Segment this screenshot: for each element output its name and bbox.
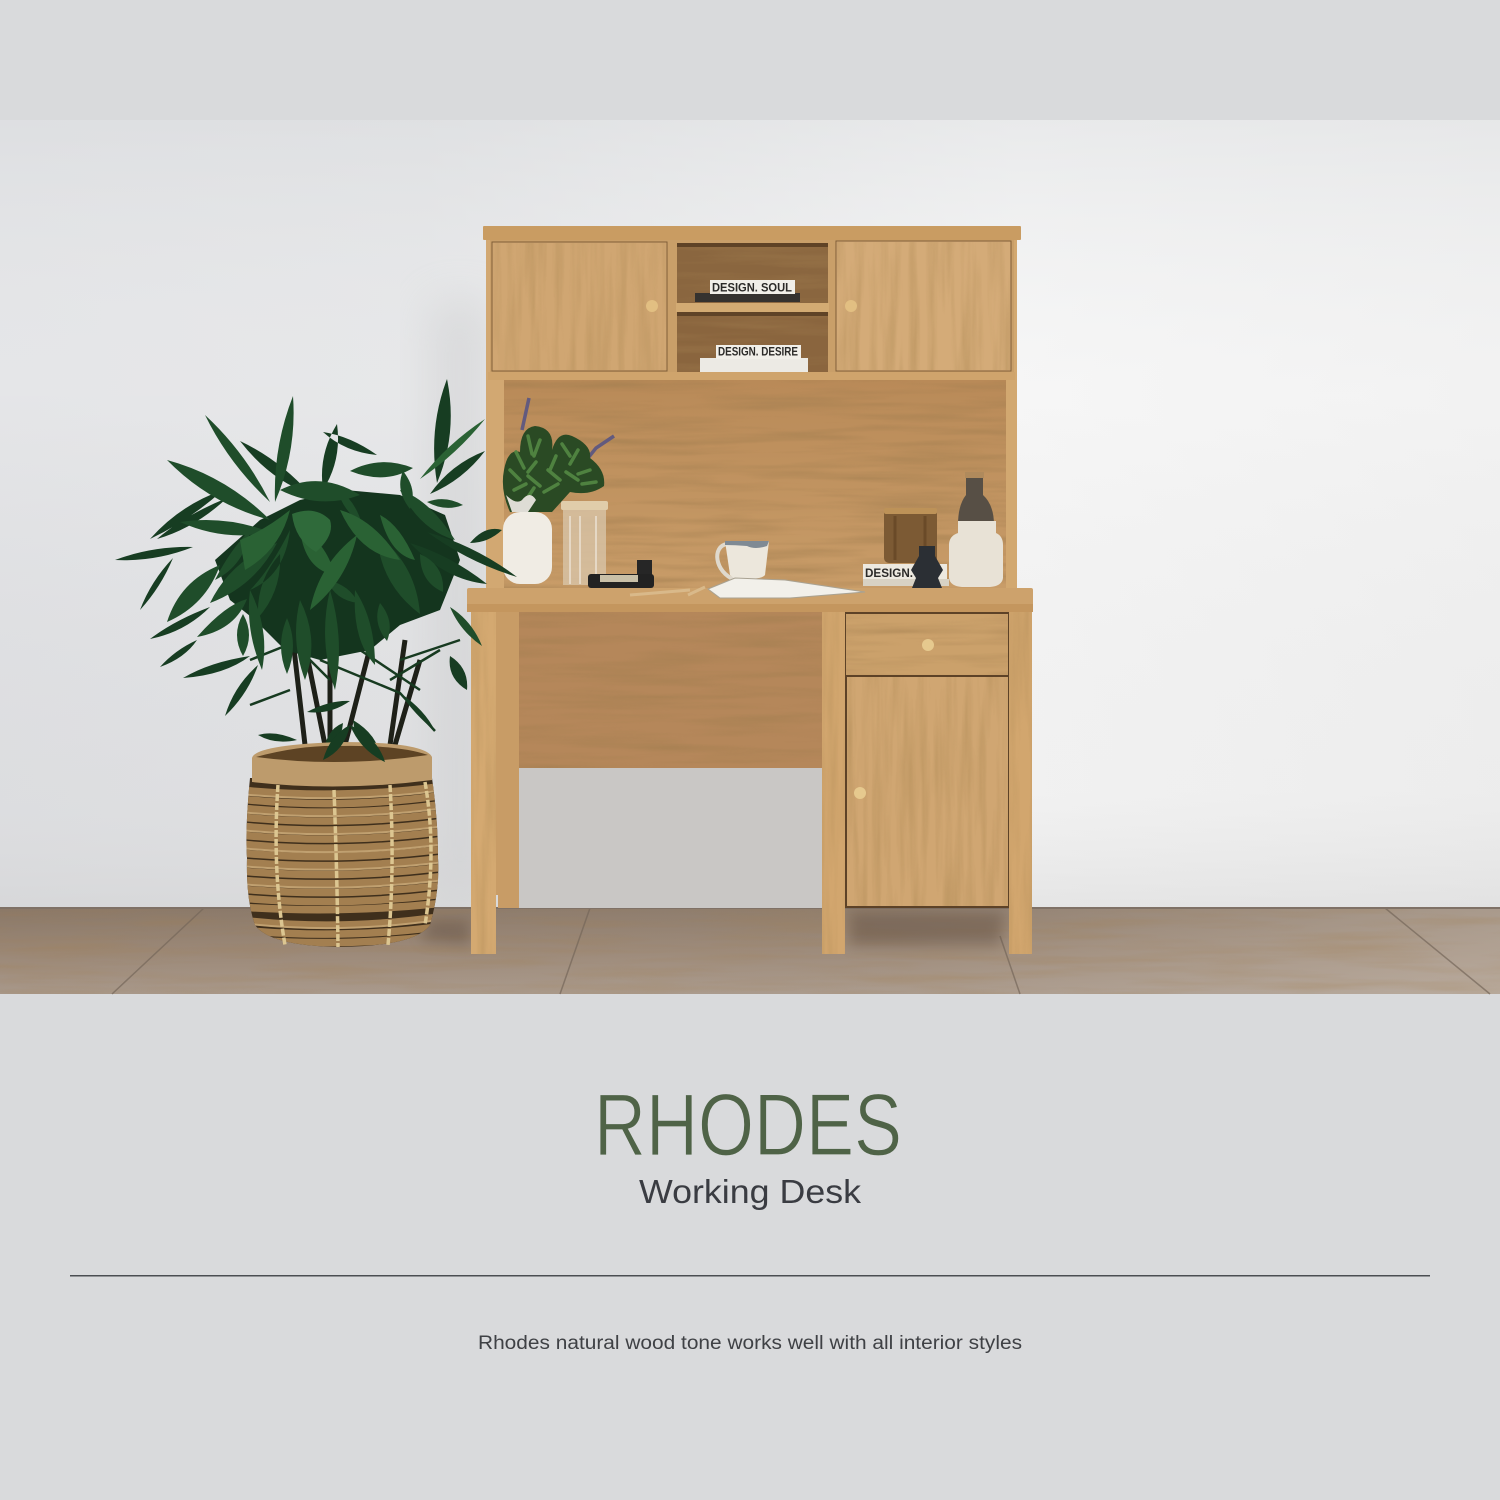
white vase — [503, 512, 552, 584]
top grey band — [0, 0, 1500, 120]
left leg — [471, 612, 519, 954]
drawer knob — [922, 639, 934, 651]
book: Design — [863, 564, 949, 586]
notebook and pencils on desktop — [630, 578, 865, 598]
pencils — [630, 587, 705, 595]
wooden floor — [0, 907, 1500, 994]
right cabinet door — [836, 241, 1011, 371]
desk — [467, 226, 1033, 954]
book: Design: DESIGN. — [865, 566, 913, 580]
lower cabinet door — [847, 677, 1008, 906]
plant in basket — [115, 379, 517, 950]
hutch top board — [483, 226, 1021, 240]
product photo: room scene — [0, 120, 1500, 994]
desktop items standing on the board — [503, 398, 1003, 588]
hutch lower shelf — [488, 372, 1015, 380]
dark foliage — [115, 379, 517, 757]
drawer — [846, 614, 1008, 675]
plant stems — [293, 620, 420, 745]
basket rim — [252, 742, 432, 787]
pale broad leaf — [292, 511, 331, 552]
bright leaves — [240, 419, 485, 610]
desktop board — [467, 588, 1033, 612]
floor shadow under desk — [420, 912, 1005, 945]
black ribbed vase — [911, 546, 943, 588]
glass jar — [561, 501, 608, 585]
divider line — [70, 1275, 1430, 1276]
door knob — [854, 787, 866, 799]
bottle — [958, 472, 994, 525]
hutch right side — [1006, 238, 1017, 590]
dark foliage mass — [215, 490, 460, 660]
potted herb plant — [503, 398, 614, 584]
subtitle: Working Desk — [639, 1173, 862, 1210]
shadow beneath desk — [518, 768, 822, 908]
cabinet recess — [845, 612, 1009, 908]
hutch left side — [486, 238, 504, 590]
modesty back panel — [517, 612, 822, 768]
upper cubby — [677, 243, 828, 303]
door knob — [646, 300, 658, 312]
right leg — [1009, 612, 1032, 954]
amber candle — [884, 508, 937, 563]
hutch back panel — [503, 380, 1007, 590]
books: Design, Desire — [700, 345, 808, 372]
middle shelf — [676, 303, 829, 312]
thin lower leaves — [250, 640, 460, 731]
bottom grey panel — [0, 994, 1500, 1500]
left cabinet door — [492, 242, 667, 371]
centre leg — [822, 612, 845, 954]
hutch cabinet back — [490, 240, 1014, 375]
books: Design, Soul: DESIGN. SOUL — [712, 282, 792, 294]
mid-green leaves — [167, 396, 482, 690]
wicker basket — [240, 742, 445, 950]
description text: Rhodes natural wood tone works well with all interior styles — [478, 1333, 1022, 1354]
lower cubby — [677, 312, 828, 372]
product title: RHODES — [594, 1075, 902, 1174]
books: Design, Desire: DESIGN. DESIRE — [718, 346, 798, 358]
white ceramic jar — [949, 521, 1003, 587]
books: Design, Soul — [695, 280, 800, 302]
leaves overlapping the rim — [323, 725, 385, 762]
ceramic cup — [717, 541, 769, 580]
black tube — [588, 560, 654, 588]
open notebook — [708, 578, 865, 598]
wall — [0, 120, 1500, 910]
door knob — [845, 300, 857, 312]
